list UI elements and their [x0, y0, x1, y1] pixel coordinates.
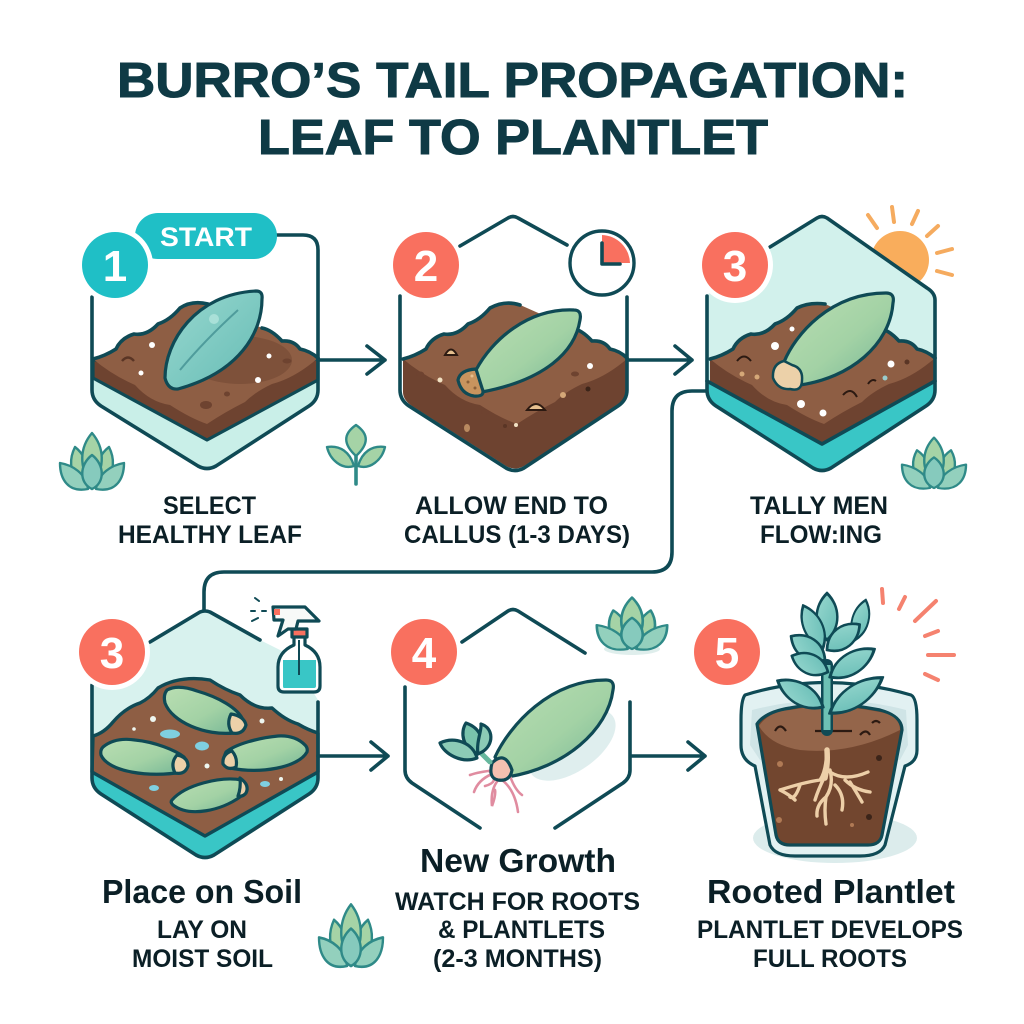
icon: clock [570, 231, 634, 295]
arrow 1 to 2 [318, 346, 385, 374]
caption new growth: & PLANTLETS [438, 916, 605, 944]
roots [470, 770, 522, 812]
teal water layer [707, 381, 935, 470]
hexagon outline [92, 235, 318, 468]
badge 3 lower [74, 614, 150, 690]
caption rooted plantlet: Rooted Plantlet [707, 873, 955, 910]
decorative sprig [327, 425, 385, 484]
panel: rooted plantlet pot [741, 593, 917, 863]
caption rooted plantlet [697, 873, 963, 973]
arrow 3 to 4 [318, 742, 388, 770]
plantlet sprout [440, 723, 491, 762]
connector from step 3 to lower row [204, 391, 707, 610]
badge 5: 5 [715, 629, 739, 678]
plant leaves [773, 593, 888, 722]
pale base layer [92, 372, 318, 468]
hexagon outline [405, 610, 630, 828]
caption place on soil: Place on Soil [102, 873, 302, 910]
sparkle rays [882, 589, 954, 680]
callus bud [491, 758, 512, 780]
arrow 4 to 5 [632, 742, 705, 770]
background hexagon [92, 611, 318, 858]
badge 1: 1 [103, 242, 127, 291]
teal water layer [92, 770, 318, 858]
caption new growth: (2-3 MONTHS) [433, 945, 602, 973]
start pill [135, 213, 277, 259]
caption 3 [750, 492, 888, 549]
panel: step 1 select healthy leaf [92, 235, 318, 468]
panel: step 2 callus [400, 216, 628, 470]
soil in pot [757, 704, 902, 845]
soil leaves [101, 687, 307, 812]
hexagon outline [707, 216, 935, 470]
decorative succulent top [597, 597, 667, 655]
background hexagon [707, 216, 935, 470]
soil [403, 303, 628, 468]
plant stem [821, 665, 833, 730]
start pill: START [160, 222, 253, 252]
icon: sun [868, 207, 952, 289]
arrow 2 to 3 [627, 346, 692, 374]
caption new growth: WATCH FOR ROOTS [395, 888, 640, 916]
title [117, 54, 908, 165]
caption 3: FLOW:ING [760, 521, 882, 549]
badge 5 [694, 619, 760, 685]
caption place on soil: MOIST SOIL [132, 945, 273, 973]
decorative succulent right [902, 438, 966, 489]
badge 2 [393, 232, 459, 298]
roots [780, 750, 870, 824]
leaf [165, 291, 262, 389]
title: BURRO’S TAIL PROPAGATION: [117, 54, 908, 108]
badge 4: 4 [412, 629, 437, 678]
soil [92, 679, 318, 836]
decorative succulent left [60, 433, 124, 490]
leaf [773, 293, 893, 390]
decorative succulent bottom [319, 904, 383, 967]
panel: new growth [405, 610, 630, 828]
badge 4 [391, 619, 457, 685]
leaf shadow [516, 695, 628, 795]
soil [93, 303, 318, 440]
panel: place on soil [92, 611, 318, 858]
pot shadow [753, 813, 917, 863]
hexagon outline [92, 611, 318, 858]
caption 1 [118, 492, 302, 549]
caption 1: SELECT [163, 492, 256, 520]
badge 3 lower: 3 [100, 629, 124, 678]
caption rooted plantlet: PLANTLET DEVELOPS [697, 916, 963, 944]
badge 1 [77, 227, 153, 303]
caption 2: CALLUS (1-3 DAYS) [404, 521, 630, 549]
caption rooted plantlet: FULL ROOTS [753, 945, 907, 973]
caption place on soil: LAY ON [157, 916, 247, 944]
glass pot [741, 682, 917, 856]
caption new growth: New Growth [420, 842, 616, 879]
panel: step 3 [707, 216, 935, 470]
badge 3 [697, 227, 773, 303]
title: LEAF TO PLANTLET [258, 111, 768, 165]
soil [707, 303, 935, 444]
leaf [495, 680, 613, 777]
hexagon outline [400, 216, 627, 470]
icon: spray bottle [251, 598, 320, 692]
caption 3: TALLY MEN [750, 492, 888, 520]
leaf [458, 310, 580, 396]
caption 1: HEALTHY LEAF [118, 521, 302, 549]
caption new growth [395, 842, 640, 973]
badge 3: 3 [723, 242, 747, 291]
caption 2 [404, 492, 630, 549]
caption 2: ALLOW END TO [415, 492, 608, 520]
caption place on soil [102, 873, 302, 973]
badge 2: 2 [414, 242, 438, 291]
